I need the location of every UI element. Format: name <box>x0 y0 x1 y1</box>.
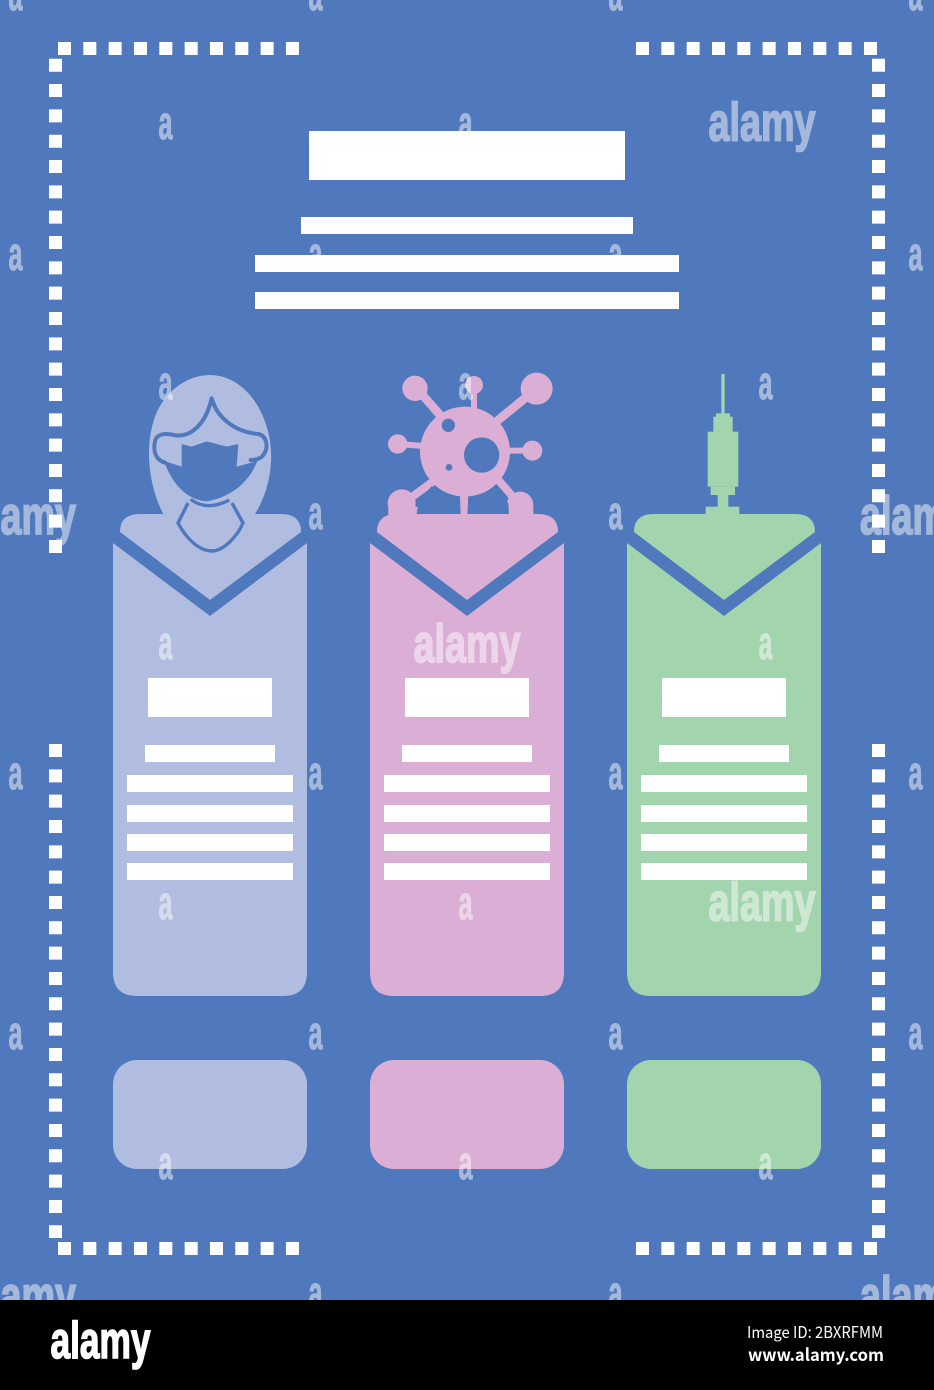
watermarks: a <box>308 746 323 799</box>
footer logo: alamy <box>50 1312 151 1370</box>
watermarks: alamy <box>708 92 816 152</box>
card heading placeholder <box>405 678 529 717</box>
watermarks: a <box>908 227 923 280</box>
watermarks: a <box>458 876 473 929</box>
watermarks: a <box>158 356 173 409</box>
watermarks: a <box>908 1006 923 1059</box>
watermarks: a <box>158 96 173 149</box>
watermarks: a <box>608 486 623 539</box>
panel: mask card <box>113 503 307 996</box>
watermarks: a <box>758 1136 773 1189</box>
watermarks: a <box>158 876 173 929</box>
footer box: lavender <box>113 1060 307 1169</box>
panel: virus card <box>370 514 564 996</box>
watermarks: alamy <box>414 614 520 674</box>
watermarks: a <box>308 1266 323 1319</box>
watermarks: alamy <box>708 872 816 932</box>
neck outline <box>178 503 243 551</box>
watermarks: a <box>458 96 473 149</box>
watermarks: a <box>608 1006 623 1059</box>
watermarks: a <box>8 746 23 799</box>
watermarks: a <box>308 227 323 280</box>
card flap <box>377 514 558 600</box>
watermarks: a <box>458 356 473 409</box>
watermarks: a <box>608 227 623 280</box>
card heading placeholder <box>662 678 786 717</box>
watermarks: a <box>458 1136 473 1189</box>
card flap <box>120 514 301 600</box>
black footer bar <box>0 1300 934 1390</box>
title placeholder <box>309 131 625 180</box>
subtitle placeholder lines <box>255 217 679 309</box>
watermarks: a <box>608 746 623 799</box>
footer box: green <box>627 1060 821 1169</box>
watermarks: a <box>308 1006 323 1059</box>
panel: vaccine card <box>627 514 821 996</box>
watermarks: a <box>908 746 923 799</box>
icon: woman wearing a mask <box>149 375 271 514</box>
icon: virus <box>388 373 553 520</box>
watermarks: a <box>158 616 173 669</box>
footer box: pink <box>370 1060 564 1169</box>
watermarks: a <box>158 1136 173 1189</box>
card body <box>370 543 564 996</box>
card text lines <box>641 745 807 880</box>
watermarks: a <box>758 356 773 409</box>
card body <box>627 543 821 996</box>
image id: Image ID: 2BXRFMM <box>747 1319 883 1343</box>
watermarks: a <box>308 486 323 539</box>
watermarks: a <box>8 227 23 280</box>
watermarks: a <box>608 1266 623 1319</box>
card flap <box>634 514 815 600</box>
dotted frame <box>56 48 878 1248</box>
watermarks: a <box>8 1006 23 1059</box>
website: www.alamy.com <box>748 1341 884 1366</box>
icon: syringe <box>706 374 739 517</box>
card text lines <box>384 745 550 880</box>
card text lines <box>127 745 293 880</box>
watermarks: a <box>758 616 773 669</box>
card heading placeholder <box>148 678 272 717</box>
card body <box>113 543 307 996</box>
